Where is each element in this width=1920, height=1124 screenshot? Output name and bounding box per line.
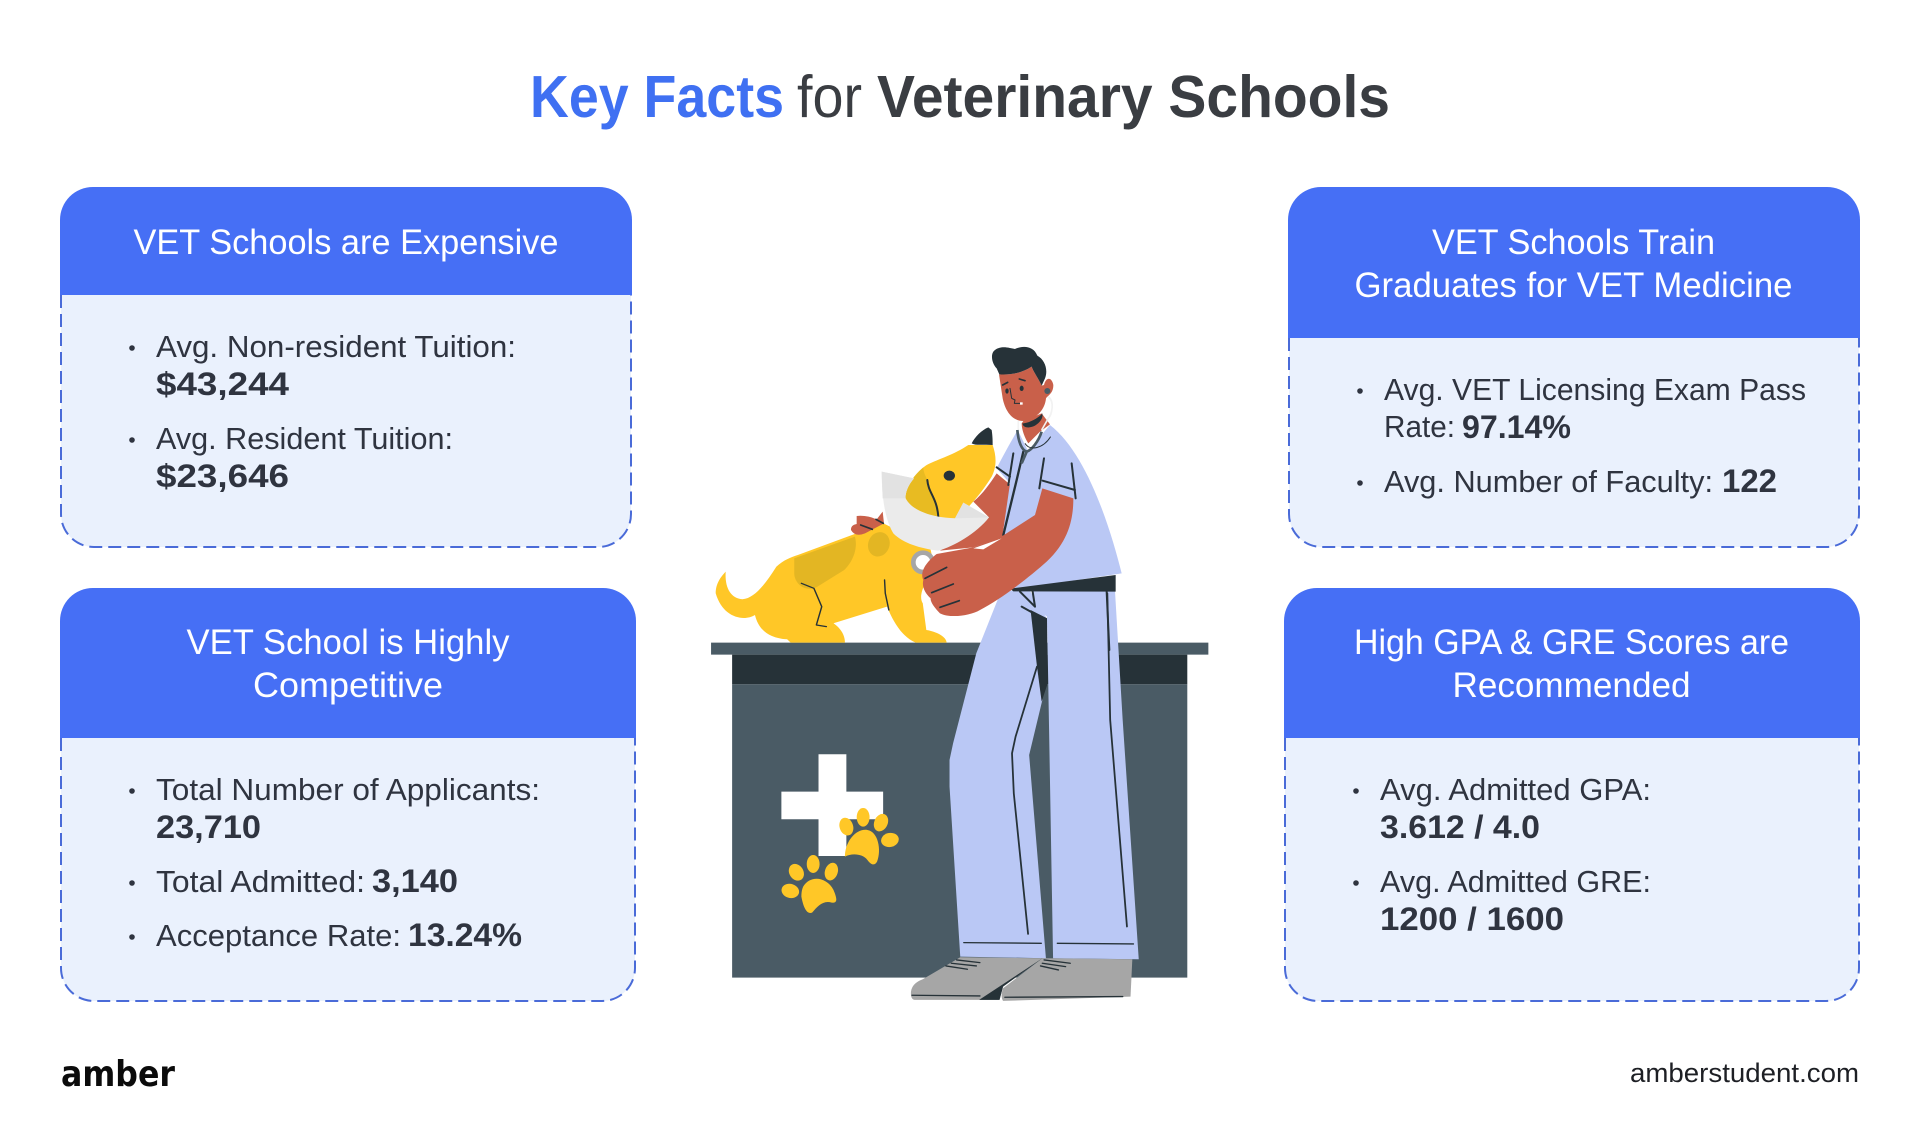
trouser creases <box>1012 593 1127 934</box>
list: tuition figures: Avg. Resident Tuition: <box>156 421 453 456</box>
dog head, cone and far arm <box>851 427 1011 551</box>
panel: High GPA and GRE Scores <box>1284 588 1860 1001</box>
title <box>530 64 1390 130</box>
far arm <box>940 473 1011 551</box>
panel: VET Schools are Expensive <box>60 187 632 547</box>
list: admissions figures: 13.24% <box>408 917 522 953</box>
list: exam and faculty figures: Avg. Number of Faculty: <box>1384 464 1713 499</box>
list: tuition figures: $23,646 <box>156 458 289 494</box>
panel header: expensive: VET Schools are Expensive <box>134 223 558 262</box>
panel header: expensive <box>60 187 632 295</box>
near arm and hand <box>922 488 1073 616</box>
list: GPA and GRE figures: 3.612 / 4.0 <box>1380 809 1540 845</box>
panel header: GPA and GRE: Recommended <box>1452 666 1690 705</box>
list: tuition figures <box>129 329 516 494</box>
far leg <box>1032 588 1139 959</box>
near leg <box>950 591 1048 958</box>
illustration: vet examining dog at table <box>711 347 1208 1001</box>
panel header: GPA and GRE <box>1284 588 1860 738</box>
panel header: train graduates: Graduates for VET Medicine <box>1354 266 1792 305</box>
panel header: competitive: VET School is Highly <box>186 623 510 662</box>
icon: paw print lower <box>779 855 840 913</box>
right shoe <box>1002 958 1132 1001</box>
exam table <box>711 643 1208 978</box>
gap between legs <box>1031 610 1048 702</box>
list: GPA and GRE figures: Avg. Admitted GRE: <box>1380 864 1651 899</box>
panel header: competitive: Competitive <box>253 666 443 705</box>
table, cross, paws and dog body <box>711 523 1208 978</box>
belt <box>1010 575 1116 592</box>
shirt <box>997 425 1122 590</box>
list: GPA and GRE figures: 1200 / 1600 <box>1380 901 1564 937</box>
left shoe <box>911 957 1042 1000</box>
list: exam and faculty figures <box>1357 372 1806 499</box>
panel header: GPA and GRE: High GPA & GRE Scores are <box>1354 623 1789 662</box>
head and neck <box>992 347 1053 463</box>
dog head <box>905 427 996 518</box>
title: for <box>797 64 862 130</box>
logo: amber: amber <box>61 1054 175 1095</box>
chest piece <box>913 553 933 572</box>
panel: VET Schools Train Graduates <box>1288 187 1860 547</box>
list: exam and faculty figures: Rate: <box>1384 409 1455 444</box>
panel header: competitive <box>60 588 636 738</box>
shirt and waist lines <box>997 453 1109 650</box>
far hand <box>851 512 884 535</box>
list: admissions figures <box>129 772 540 953</box>
title: Key Facts <box>530 64 784 130</box>
list: admissions figures: 3,140 <box>372 863 458 899</box>
panel header: train graduates <box>1288 187 1860 338</box>
list: GPA and GRE figures <box>1353 772 1651 937</box>
list: admissions figures: 23,710 <box>156 809 261 845</box>
footer url: amberstudent.com <box>1630 1058 1859 1088</box>
list: GPA and GRE figures: Avg. Admitted GPA: <box>1380 772 1651 807</box>
list: admissions figures: Total Admitted: <box>156 864 365 899</box>
stethoscope tube <box>1003 452 1023 535</box>
vet torso, arm and head <box>913 347 1122 650</box>
list: exam and faculty figures: 97.14% <box>1462 409 1571 445</box>
dog body <box>716 523 947 643</box>
list: admissions figures: Total Number of Applicants: <box>156 772 540 807</box>
list: admissions figures: Acceptance Rate: <box>156 918 401 953</box>
panel header: train graduates: VET Schools Train <box>1432 223 1715 262</box>
trousers and shoes <box>911 588 1139 1001</box>
icon: paw print upper <box>837 808 900 864</box>
panel: VET School is Highly Competitive <box>60 588 636 1001</box>
list: tuition figures: $43,244 <box>156 366 289 402</box>
stethoscope <box>1017 388 1052 463</box>
list: exam and faculty figures: Avg. VET Licensing Exam Pass <box>1384 372 1806 407</box>
icon: white medical cross <box>781 754 883 856</box>
list: tuition figures: Avg. Non-resident Tuition: <box>156 329 516 364</box>
title: Veterinary Schools <box>877 64 1390 130</box>
list: exam and faculty figures: 122 <box>1722 463 1777 499</box>
cone collar <box>882 472 989 551</box>
